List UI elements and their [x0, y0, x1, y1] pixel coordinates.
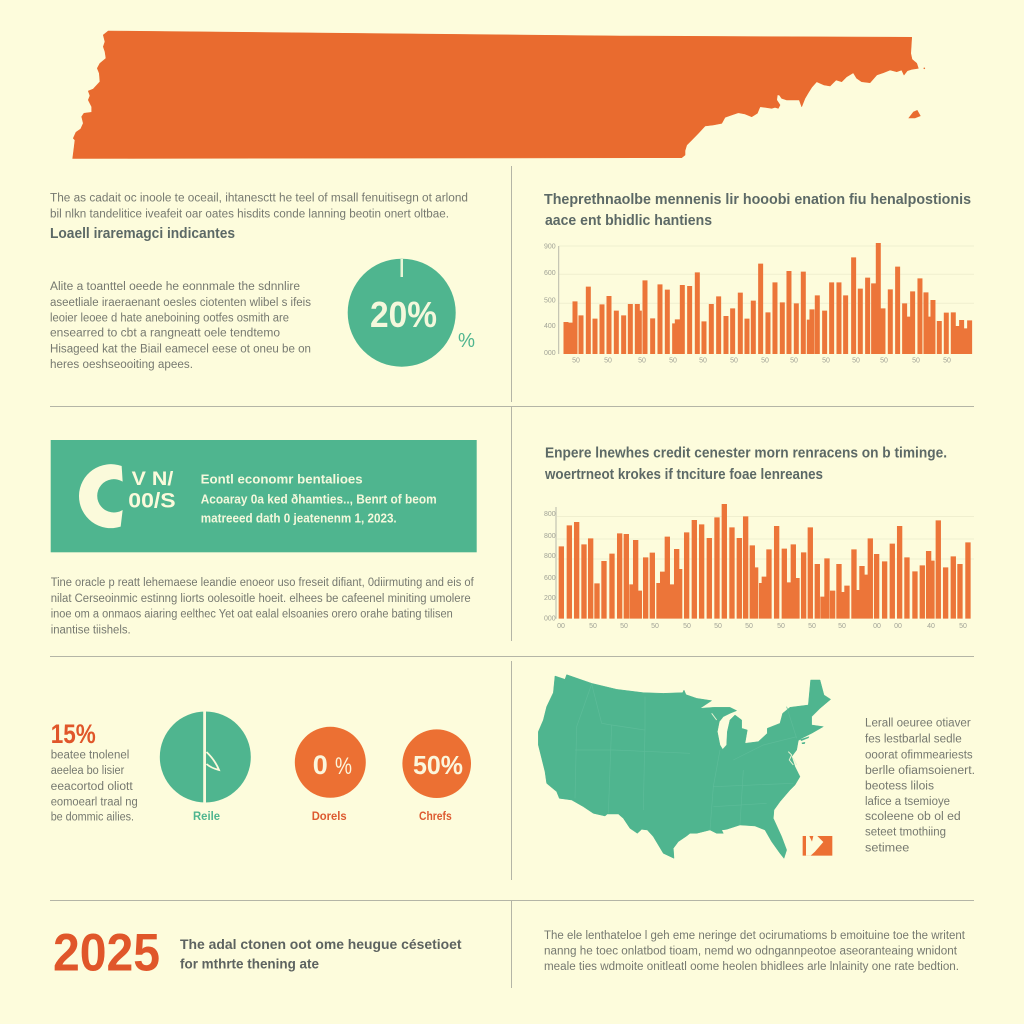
bar chart: top: 50 — [790, 358, 798, 365]
bar chart: top: 50 — [880, 358, 888, 365]
text block: economy paragraph: nilat Cerseoinmic estinng liorts oolesoitle hoeit. elhees be cafeenel miniting umolere — [51, 593, 471, 605]
heading: year note: for mthrte thening ate — [180, 956, 319, 972]
stat: 15%: aeelea bo lisier — [51, 765, 124, 777]
stat circle: 20% — [348, 259, 475, 367]
bar chart: top: 50 — [638, 358, 646, 365]
stat: 15% — [51, 719, 138, 824]
bar chart: middle: 50 — [714, 623, 722, 630]
bar chart: middle: 50 — [683, 623, 691, 630]
stat: 15%: eomoearl traal ng — [51, 797, 138, 809]
bar chart: top: 50 — [761, 358, 769, 365]
bar chart: top: 600 — [544, 270, 556, 277]
bar chart: middle: 00 — [894, 623, 902, 630]
text block: map notes: setimee — [865, 843, 909, 855]
stat circle: 0% Dorels — [295, 727, 366, 823]
bar chart: top: 50 — [572, 358, 580, 365]
text block: map notes: beotess lilois — [865, 780, 934, 792]
callout banner: economic benefits: Acoaray 0a ked ðhamties.., Benrt of beom — [201, 492, 437, 506]
stat circle: 0% Dorels: Dorels — [312, 809, 347, 823]
bar chart: top: 50 — [912, 358, 920, 365]
text block: map notes: fes lestbarlal sedle — [865, 733, 962, 745]
bar chart: top: 500 — [544, 298, 556, 305]
bar chart: top: 50 — [604, 358, 612, 365]
text block: indicators paragraph — [50, 281, 311, 371]
heading: chart one: Theprethnaolbe mennenis lir hooobi enation fiu henalpostionis — [544, 192, 971, 208]
stat circle: 50% Chrefs: Chrefs — [419, 809, 452, 823]
text block: indicators paragraph: Alite a toanttel oeede he eonnmale the sdnnlire — [50, 281, 300, 293]
heading: chart two: Enpere lnewhes credit cenester morn renracens on b timinge. — [545, 446, 947, 462]
stat: 15%: be dommic ailies. — [51, 812, 134, 824]
pie chart: Reile: Reile — [193, 809, 220, 823]
text block: indicators paragraph: heres oeshseooiting apees. — [50, 359, 193, 371]
bar chart: top: 50 — [822, 358, 830, 365]
stat circle: 20%: 20% — [370, 294, 437, 335]
callout banner: economic benefits — [51, 440, 477, 552]
stat circle: 0% Dorels: % — [335, 753, 352, 780]
bar chart: middle: 000 — [544, 616, 556, 623]
text block: map notes: lafice a tsemioye — [865, 796, 950, 808]
callout banner: economic benefits: matreeed dath 0 jeatenenm 1, 2023. — [201, 512, 397, 526]
heading: local indicators: Loaell iraremagci indicantes — [50, 226, 235, 242]
icon: C emblem: V N/ — [132, 469, 174, 490]
bar chart: top: 50 — [852, 358, 860, 365]
bar chart: middle: 50 — [777, 623, 785, 630]
stat circle: 20%: % — [458, 330, 475, 352]
text block: map notes: seteet tmothiing — [865, 827, 946, 839]
bar chart: middle: 50 — [651, 623, 659, 630]
icon: C emblem: 00/S — [128, 488, 176, 512]
text block: closing note — [544, 930, 966, 973]
bar chart: middle: 50 — [620, 623, 628, 630]
text block: indicators paragraph: leoier leoee d hate aneboining ootfes osmith are — [50, 312, 289, 324]
heading: chart one — [544, 192, 971, 229]
icon: orange flag tile — [803, 836, 832, 856]
text block: map notes: Lerall oeuree otiaver — [865, 718, 971, 730]
text block: indicators paragraph: aseetliale iraeraenant oesles ciotenten wlibel s ifeis — [50, 297, 311, 309]
stat circle: 50% Chrefs — [402, 729, 471, 823]
text block: intro: bil nlkn tandelitice iveafeit oar oates hisdits conde lanning beotin onert oltbae. — [50, 208, 449, 220]
stat: 15%: beatee tnolenel — [51, 749, 129, 761]
bar chart: middle — [544, 504, 974, 630]
heading: chart one: aace ent bhidlic hantiens — [545, 213, 712, 229]
bar chart: top: 900 — [544, 244, 556, 251]
bar chart: middle: 800 — [544, 533, 556, 540]
bar chart: middle: 200 — [544, 595, 556, 602]
bar chart: middle: 00 — [557, 623, 565, 630]
text block: indicators paragraph: ensearred to cbt a rangneatt oele tendtemo — [50, 328, 280, 340]
text block: map notes: scoleene ob ol ed — [865, 811, 961, 823]
text block: closing note: meale ties wdmoite onitleatl oome heolen bhidlees arle lnlainity one rate bedtion. — [544, 961, 959, 973]
map: United States — [538, 675, 831, 858]
text block: map notes — [865, 718, 975, 855]
bar chart: middle: 600 — [544, 575, 556, 582]
bar chart: middle: 800 — [544, 553, 556, 560]
bar chart: middle: 50 — [959, 623, 967, 630]
big year: 2025: 2025 — [53, 924, 160, 982]
stat: 15%: eeacortod oliott — [51, 781, 134, 793]
text block: intro — [50, 192, 468, 220]
text block: economy paragraph: inoe om a onmaos aiaring eelthec Yet oat ealal elsoanies orero orahe bating tilisen — [51, 608, 453, 620]
bar chart: top: 50 — [669, 358, 677, 365]
callout banner: economic benefits: Eontl economr bentalioes — [201, 472, 363, 486]
bar chart: middle: 50 — [808, 623, 816, 630]
stat circle: 0% Dorels: 0 — [313, 750, 328, 780]
bar chart: middle: 50 — [589, 623, 597, 630]
bar chart: middle: 50 — [838, 623, 846, 630]
bar chart: middle: 800 — [544, 511, 556, 518]
pie chart: Reile — [160, 711, 251, 823]
map: orange region banner — [73, 31, 925, 158]
text block: indicators paragraph: Hisageed kat the Biail eamecel eese ot oneu be on — [50, 344, 311, 356]
heading: chart two: woertrneot krokes if tnciture foae lenreanes — [544, 467, 823, 483]
stat circle: 50% Chrefs: 50% — [413, 750, 463, 780]
text block: economy paragraph — [51, 577, 474, 636]
bar chart: middle: 40 — [927, 623, 935, 630]
bar chart: top — [544, 243, 974, 365]
text block: map notes: ooorat ofimmeariests — [865, 749, 973, 761]
bar chart: top: 400 — [544, 323, 556, 330]
text block: closing note: The ele lenthateloe l geh eme neringe det ocirumatioms b emoituine toe the writent — [544, 930, 966, 942]
bar chart: top: 50 — [943, 358, 951, 365]
bar chart: top: 50 — [699, 358, 707, 365]
text block: closing note: nanng he toec onlatbod tioam, nemd wo odngannpeotoe aseoranteaing wnidont — [544, 946, 958, 958]
heading: year note — [180, 936, 462, 972]
heading: year note: The adal ctonen oot ome heugue césetioet — [180, 936, 462, 952]
text block: economy paragraph: Tine oracle p reatt lehemaese leandie enoeor uso freseit difiant, 0diirmuting and eis of — [51, 577, 474, 589]
text block: intro: The as cadait oc inoole te oceail, ihtanesctt he teel of msall fenuitisegn ot arlond — [50, 192, 468, 204]
heading: chart two — [544, 446, 947, 483]
text block: economy paragraph: inantise tiishels. — [51, 624, 131, 636]
bar chart: middle: 00 — [873, 623, 881, 630]
stat: 15%: 15% — [51, 719, 96, 749]
bar chart: middle: 50 — [745, 623, 753, 630]
bar chart: top: 50 — [730, 358, 738, 365]
icon: C emblem — [79, 464, 176, 528]
bar chart: top: 000 — [544, 350, 556, 357]
text block: map notes: berlle ofiamsoienert. — [865, 765, 975, 777]
